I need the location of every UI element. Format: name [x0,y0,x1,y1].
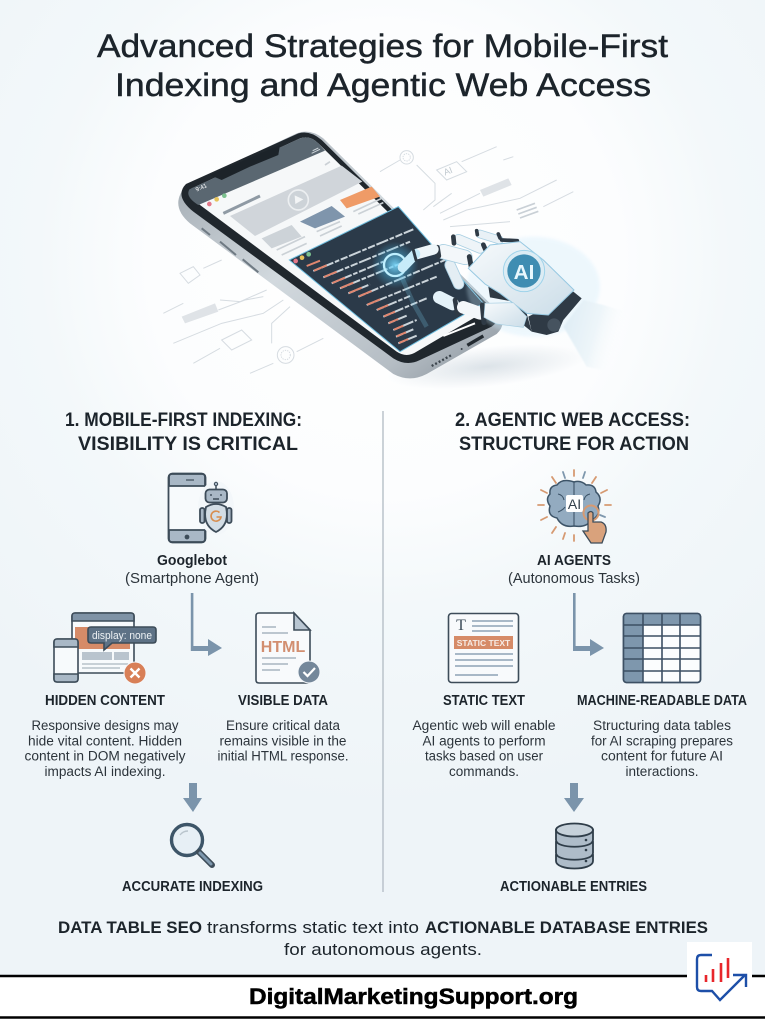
touch glow [372,242,418,288]
machine-readable data copy [577,693,747,779]
visible data text: VISIBLE DATA [238,693,328,709]
icon: magnifier [172,824,212,865]
logo [687,942,752,1002]
title: Advanced Strategies for Mobile-First [97,28,668,64]
summary statement [58,919,708,959]
static text copy: tasks based on user [425,748,543,764]
heading: agentic web access: STRUCTURE FOR ACTION [459,434,689,455]
label: Googlebot: (Smartphone Agent) [125,571,259,587]
icon: hidden content: display: none [92,630,152,642]
label: accurate indexing: ACCURATE INDEXING [122,879,263,895]
visible data text: initial HTML response. [218,748,348,764]
label: Googlebot: Googlebot [157,553,227,569]
static text copy: AI agents to perform [422,734,546,748]
static text copy: STATIC TEXT [443,693,525,709]
hidden content text: impacts AI indexing. [44,764,166,779]
heading: mobile-first indexing [65,410,302,455]
static text copy [412,693,556,779]
phone screen [190,137,487,355]
arrow: AI agents to machine-readable data [573,593,604,656]
side buttons [202,228,258,272]
phone body [178,132,502,378]
arrow: down to accurate indexing [183,783,202,812]
visible data text: Ensure critical data [226,718,340,733]
icon: data table [624,614,700,682]
visible data text: remains visible in the [220,734,346,748]
hidden content text: content in DOM negatively [24,748,186,764]
hidden content text: hide vital content. Hidden [28,734,182,748]
thumb [439,297,484,323]
heading: mobile-first indexing: 1. MOBILE-FIRST INDEXING: [65,410,302,431]
hidden content text: HIDDEN CONTENT [45,693,165,709]
arrow: Googlebot to visible data [191,593,222,656]
summary statement: DATA TABLE SEO [58,919,202,937]
visible data text [218,693,348,764]
circuit lines around the phone [163,147,573,373]
palm [468,242,574,315]
label: AI agents: AI AGENTS [537,553,611,569]
code panel [289,207,483,352]
heading: agentic web access [455,410,690,455]
label: actionable entries: ACTIONABLE ENTRIES [500,879,647,895]
heading: agentic web access: 2. AGENTIC WEB ACCESS: [455,410,690,431]
icon: AI brain with pointer hand: AI [568,496,581,512]
title [97,28,668,103]
summary statement: ACTIONABLE DATABASE ENTRIES [425,919,708,937]
static text copy: commands. [449,764,519,779]
hidden content text: Responsive designs may [32,718,179,733]
icon: Googlebot phone and robot [168,474,234,542]
icon: AI brain with pointer hand [538,470,611,543]
static text copy: Agentic web will enable [412,718,556,733]
phone shadow [385,336,588,397]
footer rules [0,976,765,1018]
label: AI agents: (Autonomous Tasks) [508,571,640,587]
web page wireframe [207,162,383,255]
machine-readable data copy: for AI scraping prepares [591,734,733,748]
illustration: phone with robotic AI hand [163,132,588,397]
home indicator and ports [443,323,475,336]
hidden content text [24,693,186,779]
illustration: phone with robotic AI hand: 9:41 [195,183,209,193]
label: Googlebot [125,553,259,587]
upper fingers [403,231,517,284]
title: Indexing and Agentic Web Access [115,67,651,103]
summary statement: for autonomous agents. [284,941,482,959]
heading: mobile-first indexing: VISIBILITY IS CRITICAL [78,434,298,455]
forearm [563,300,630,370]
icon: static text document [448,614,518,682]
phone bezel [181,132,498,363]
AI badge [503,250,545,292]
machine-readable data copy: interactions. [626,764,698,779]
icon: hidden content [54,613,156,684]
status bar and notch [188,137,325,205]
footer site name: DigitalMarketingSupport.org [249,984,578,1009]
icon: HTML file: HTML [261,639,305,656]
summary statement: transforms static text into [207,919,419,937]
label: AI agents [508,553,640,587]
AI badge: AI [514,261,534,284]
illustration: phone with robotic AI hand: AI [442,165,454,178]
machine-readable data copy: content for future AI [601,748,723,764]
machine-readable data copy: Structuring data tables [593,718,731,733]
icon: static text document: T [456,617,466,634]
wrist [528,292,582,335]
icon: database [556,824,593,868]
arrow: down to actionable entries [564,783,584,812]
center divider [382,411,384,892]
icon: static text document: STATIC TEXT [457,638,511,648]
icon: HTML file [256,613,320,683]
robotic hand [403,231,630,370]
